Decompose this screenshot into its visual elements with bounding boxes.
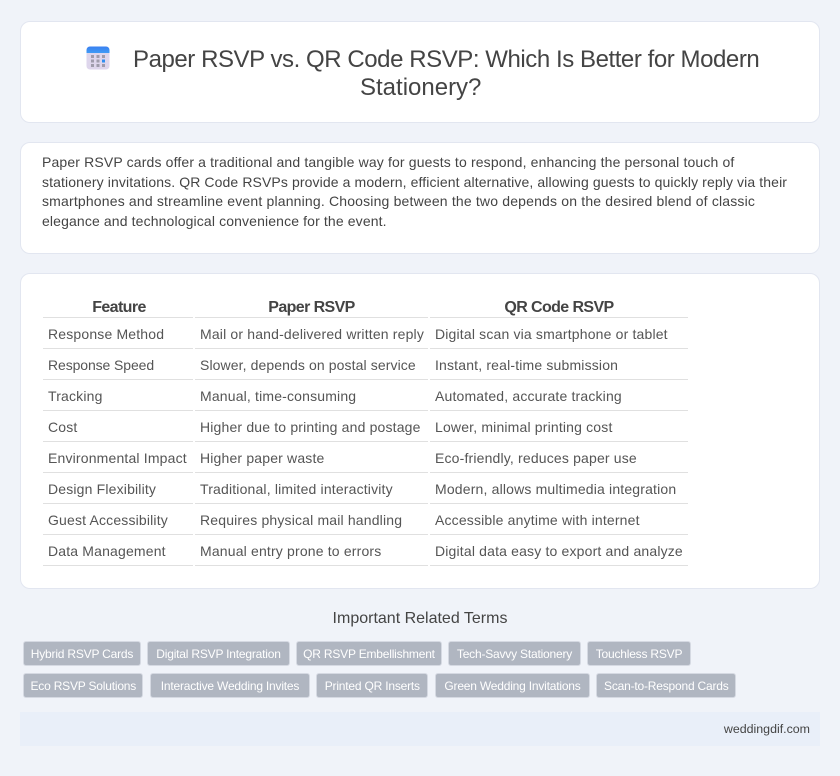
intro text: Paper RSVP cards offer a traditional and tangible way for guests to respond, enhancing the personal touch of — [42, 154, 734, 170]
table header: Feature: Feature — [92, 299, 146, 316]
row: Response Speed: Instant, real-time submission — [435, 357, 618, 373]
panel: introduction — [20, 142, 820, 254]
row: Environmental Impact: Eco-friendly, reduces paper use — [435, 450, 637, 466]
row: Response Method: Mail or hand-delivered written reply — [200, 326, 424, 342]
row: Design Flexibility: Modern, allows multimedia integration — [435, 481, 676, 497]
intro text — [42, 154, 787, 229]
row: Tracking — [48, 388, 622, 404]
row: Cost: Cost — [48, 419, 77, 435]
tag — [150, 673, 310, 698]
tag — [596, 673, 736, 698]
tag: Digital RSVP Integration — [156, 647, 281, 661]
row: Response Method: Response Method — [48, 326, 164, 342]
icon: calendar — [86, 46, 110, 70]
tag — [147, 641, 290, 666]
tag: Printed QR Inserts — [325, 679, 420, 693]
row: Cost: Higher due to printing and postage — [200, 419, 421, 435]
row: Design Flexibility: Traditional, limited interactivity — [200, 481, 393, 497]
tags: related terms — [23, 641, 736, 698]
row: Guest Accessibility: Accessible anytime with internet — [435, 512, 640, 528]
row: Data Management: Digital data easy to export and analyze — [435, 543, 683, 559]
intro text: elegance and technological convenience for the event. — [42, 213, 387, 229]
tag — [296, 641, 442, 666]
row: Response Speed — [48, 357, 618, 373]
footer source: weddingdif.com — [724, 722, 810, 736]
tag: Green Wedding Invitations — [444, 679, 581, 693]
row: Data Management — [48, 543, 683, 559]
title — [133, 46, 759, 101]
row: Tracking: Tracking — [48, 388, 103, 404]
row: Design Flexibility — [48, 481, 676, 497]
title: Stationery? — [360, 74, 481, 101]
tag: Tech-Savvy Stationery — [457, 647, 572, 661]
row: Tracking: Manual, time-consuming — [200, 388, 356, 404]
row: Environmental Impact: Higher paper waste — [200, 450, 324, 466]
row: Environmental Impact — [48, 450, 637, 466]
tag — [587, 641, 691, 666]
row: Guest Accessibility: Requires physical mail handling — [200, 512, 402, 528]
row: Response Speed: Response Speed — [48, 357, 154, 373]
row: Tracking: Automated, accurate tracking — [435, 388, 622, 404]
row: Response Speed: Slower, depends on postal service — [200, 357, 416, 373]
tag: Hybrid RSVP Cards — [31, 647, 133, 661]
tag: Scan-to-Respond Cards — [604, 679, 729, 693]
tag: QR RSVP Embellishment — [303, 647, 435, 661]
tag — [435, 673, 590, 698]
tag: Interactive Wedding Invites — [161, 679, 299, 693]
intro text: smartphones and streamline event planning. Choosing between the two depends on the desired blend of classic — [42, 193, 755, 209]
intro text: stationery invitations. QR Code RSVPs provide a modern, efficient alternative, allowing guests to quickly reply via their — [42, 174, 787, 190]
tag — [23, 641, 141, 666]
tag: Eco RSVP Solutions — [30, 679, 136, 693]
row: Guest Accessibility — [48, 512, 640, 528]
row: Response Method — [48, 326, 668, 342]
row: Cost: Lower, minimal printing cost — [435, 419, 612, 435]
table header: Paper RSVP: Paper RSVP — [268, 299, 355, 316]
tag: Touchless RSVP — [596, 647, 682, 661]
row: Response Method: Digital scan via smartphone or tablet — [435, 326, 668, 342]
tag — [448, 641, 581, 666]
row: Environmental Impact: Environmental Impact — [48, 450, 187, 466]
heading: Important Related Terms: Important Related Terms — [333, 610, 507, 627]
tag — [23, 673, 143, 698]
tag — [316, 673, 428, 698]
panel: comparison table — [20, 273, 820, 589]
row: Guest Accessibility: Guest Accessibility — [48, 512, 168, 528]
row: Design Flexibility: Design Flexibility — [48, 481, 156, 497]
panel: title header — [20, 21, 820, 123]
table header: QR Code RSVP: QR Code RSVP — [504, 299, 614, 316]
row: Data Management: Data Management — [48, 543, 166, 559]
row: Cost — [48, 419, 612, 435]
footer bar — [20, 712, 820, 746]
row: Data Management: Manual entry prone to errors — [200, 543, 381, 559]
title: Paper RSVP vs. QR Code RSVP: Which Is Better for Modern — [133, 46, 759, 73]
